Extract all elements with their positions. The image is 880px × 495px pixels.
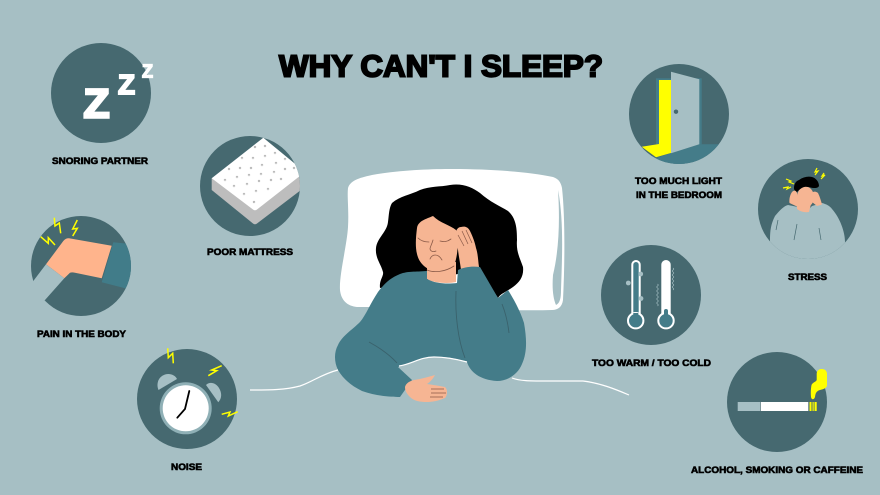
central illustration: woman in bed	[250, 169, 629, 402]
icon: pain in the body	[31, 216, 131, 316]
icon: thermometers	[601, 245, 701, 345]
label: too much light in the bedroom: IN THE BEDROOM	[636, 189, 722, 200]
lower hand	[405, 375, 447, 402]
label: stress: STRESS	[788, 271, 827, 282]
title: WHY CAN'T I SLEEP?	[279, 48, 603, 83]
icon: cigarette	[727, 352, 827, 452]
label: too warm / too cold: TOO WARM / TOO COLD	[592, 357, 711, 368]
label: pain in the body: PAIN IN THE BODY	[37, 328, 127, 339]
face	[416, 216, 458, 272]
label: poor mattress: POOR MATTRESS	[207, 246, 293, 257]
hair	[794, 177, 819, 192]
neck	[427, 262, 456, 283]
label: too much light in the bedroom	[635, 175, 722, 200]
icon: snoring partner: Z	[84, 81, 110, 127]
sweater folds	[369, 291, 509, 363]
hair	[376, 184, 523, 298]
hands	[789, 191, 798, 207]
icon: door with light	[629, 64, 730, 170]
icon: snoring partner	[51, 43, 153, 143]
icon: noise alarm clock	[137, 348, 238, 449]
neck and face	[797, 200, 812, 212]
icon: snoring partner: Z	[118, 69, 135, 100]
pillow	[340, 169, 564, 310]
label: noise: NOISE	[171, 461, 202, 472]
facial features	[418, 238, 454, 272]
icon: snoring partner: Z	[142, 62, 153, 82]
sweater	[335, 267, 526, 397]
blanket outline	[250, 357, 629, 395]
raised hand on temple	[455, 227, 479, 270]
label: too much light in the bedroom: TOO MUCH LIGHT	[635, 175, 722, 186]
icon: stressed person	[758, 159, 858, 265]
icon: poor mattress	[200, 136, 305, 236]
label: alcohol, smoking or caffeine: ALCOHOL, SMOKING OR CAFFEINE	[691, 464, 863, 475]
label: snoring partner: SNORING PARTNER	[52, 155, 148, 166]
